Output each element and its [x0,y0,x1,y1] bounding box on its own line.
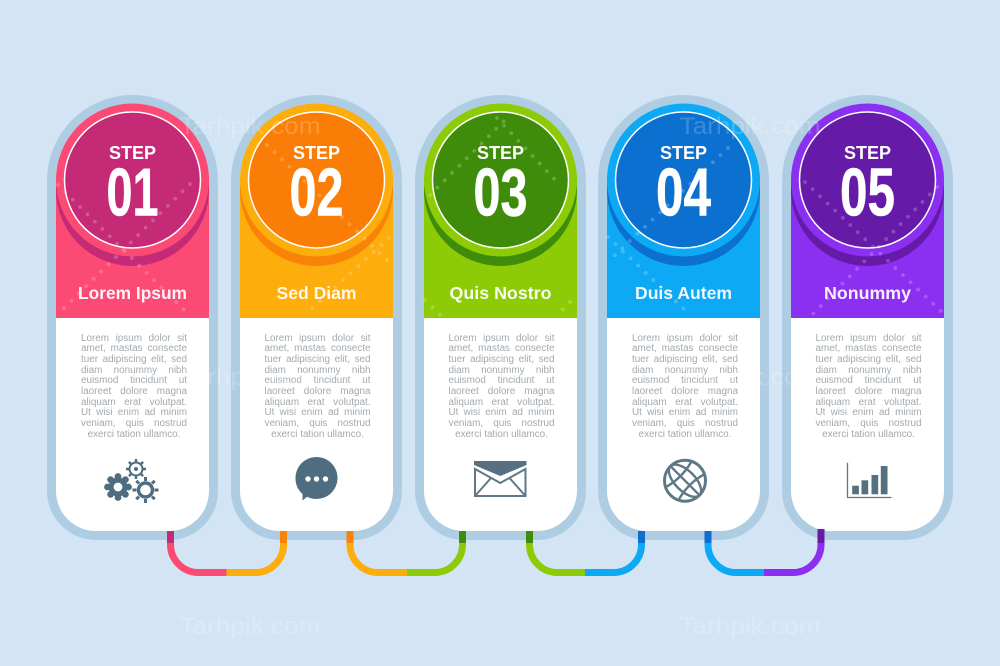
body text: Lorem ipsum dolor sit [81,332,187,344]
circle shadow [790,113,944,266]
coloured header [424,104,576,318]
watermark text: Tarhpik.com [680,364,820,391]
body text: veniam, quis nostrud [81,418,187,429]
heading: Sed Diam [276,283,356,303]
circle ring [56,104,209,256]
panel: step 02 [231,95,402,540]
body text: veniam, quis nostrud [816,418,922,429]
step badge [248,112,384,248]
body text: tuer adipiscing elit, sed [264,354,370,365]
step badge [799,112,935,248]
step number: 03 [473,154,527,230]
circle ring [790,104,944,256]
watermark text: Tarhpik.com [680,113,820,140]
step badge [432,112,568,248]
card frame [598,95,769,540]
card frame [230,95,402,540]
body text [816,332,922,440]
body text: euismod tincidunt ut [632,375,738,386]
coloured header [240,104,392,318]
body text: Ut wisi enim ad minim [264,407,370,418]
body text: amet, mastas consecte [632,343,738,354]
coloured header [56,104,209,318]
body text: Ut wisi enim ad minim [81,407,187,418]
icon: envelope [474,461,526,496]
heading: Quis Nostro [449,283,551,303]
body text: amet, mastas consecte [81,343,187,354]
card body [607,104,760,531]
panel: step 03 [415,95,586,540]
watermark text: Tarhpik.com [680,613,820,640]
icon: globe [656,452,714,510]
circle ring [607,104,760,256]
body text: aliquam erat volutpat. [81,397,187,408]
body text: Lorem ipsum dolor sit [448,332,554,344]
step badge [616,112,752,248]
body text: exerci tation ullamco. [639,429,731,440]
watermark text: Tarhpik.com [180,613,320,640]
body text: diam nonummy nibh [81,365,187,376]
step label: STEP [292,142,340,163]
body text: tuer adipiscing elit, sed [632,354,738,365]
icon: speech bubble [295,457,337,500]
panel: step 04 [598,95,769,540]
body text: tuer adipiscing elit, sed [816,354,922,365]
body text: laoreet dolore magna [264,386,370,397]
circle shadow [240,113,392,266]
body text: laoreet dolore magna [816,386,922,397]
body text [81,332,187,440]
body text: diam nonummy nibh [264,365,370,376]
body text: diam nonummy nibh [816,365,922,376]
step badge [64,112,200,248]
body text: Ut wisi enim ad minim [448,407,554,418]
body text: tuer adipiscing elit, sed [448,354,554,365]
step number: 01 [106,154,158,230]
body text [264,332,370,440]
card frame [414,95,586,540]
body text: diam nonummy nibh [632,365,738,376]
body text: aliquam erat volutpat. [448,397,554,408]
body text: amet, mastas consecte [448,343,554,354]
body text: Lorem ipsum dolor sit [632,332,738,344]
panel: step 01 [47,95,218,540]
connector: step 2 to 3 [350,531,462,572]
step label: STEP [109,142,156,163]
watermark text: Tarhpik.com [180,364,320,391]
step label: STEP [844,142,890,163]
body text: exerci tation ullamco. [88,429,180,440]
body text: Ut wisi enim ad minim [816,407,922,418]
body text: Ut wisi enim ad minim [632,407,738,418]
icon: gears [104,459,158,503]
body text: laoreet dolore magna [81,386,187,397]
coloured header [790,104,944,318]
body text: Lorem ipsum dolor sit [264,332,370,344]
body text: veniam, quis nostrud [448,418,554,429]
card body [56,104,209,531]
icon: bar chart [847,463,891,498]
heading: Duis Autem [635,283,732,303]
body text: exerci tation ullamco. [822,429,915,440]
card body [790,104,944,531]
body text: tuer adipiscing elit, sed [81,354,187,365]
watermark dots [58,118,945,317]
body text: euismod tincidunt ut [264,375,370,386]
connector: step 4 to 5 [708,529,821,572]
body text: exerci tation ullamco. [271,429,364,440]
body text: euismod tincidunt ut [81,375,187,386]
body text: Lorem ipsum dolor sit [816,332,922,344]
panel: step 05 [782,95,953,540]
body text: diam nonummy nibh [448,365,554,376]
coloured header [607,104,760,318]
circle ring [424,104,576,256]
circle shadow [607,113,760,266]
step label: STEP [476,142,524,163]
step number: 05 [840,154,894,230]
body text: laoreet dolore magna [632,386,738,397]
body text [448,332,554,440]
heading: Lorem Ipsum [78,283,187,303]
body text: euismod tincidunt ut [816,375,922,386]
body text: amet, mastas consecte [816,343,922,354]
watermark text: Tarhpik.com [180,113,320,140]
card frame [47,95,218,540]
circle ring [240,104,392,256]
watermark text [180,113,820,640]
body text: aliquam erat volutpat. [816,397,922,408]
body text: exerci tation ullamco. [455,429,548,440]
body text: veniam, quis nostrud [264,418,370,429]
body text: laoreet dolore magna [448,386,554,397]
body text: aliquam erat volutpat. [632,397,738,408]
card body [240,104,392,531]
body text: amet, mastas consecte [264,343,370,354]
connector: step 1 to 2 [170,531,284,572]
body text: aliquam erat volutpat. [264,397,370,408]
body text: euismod tincidunt ut [448,375,554,386]
heading: Nonummy [824,283,911,303]
connector: step 3 to 4 [530,531,642,572]
circle shadow [424,113,576,266]
card frame [782,95,952,540]
step number: 02 [289,154,343,230]
circle shadow [56,113,209,266]
body text [632,332,738,440]
step number: 04 [656,154,711,230]
card body [424,104,576,531]
step label: STEP [660,142,707,163]
body text: veniam, quis nostrud [632,418,738,429]
